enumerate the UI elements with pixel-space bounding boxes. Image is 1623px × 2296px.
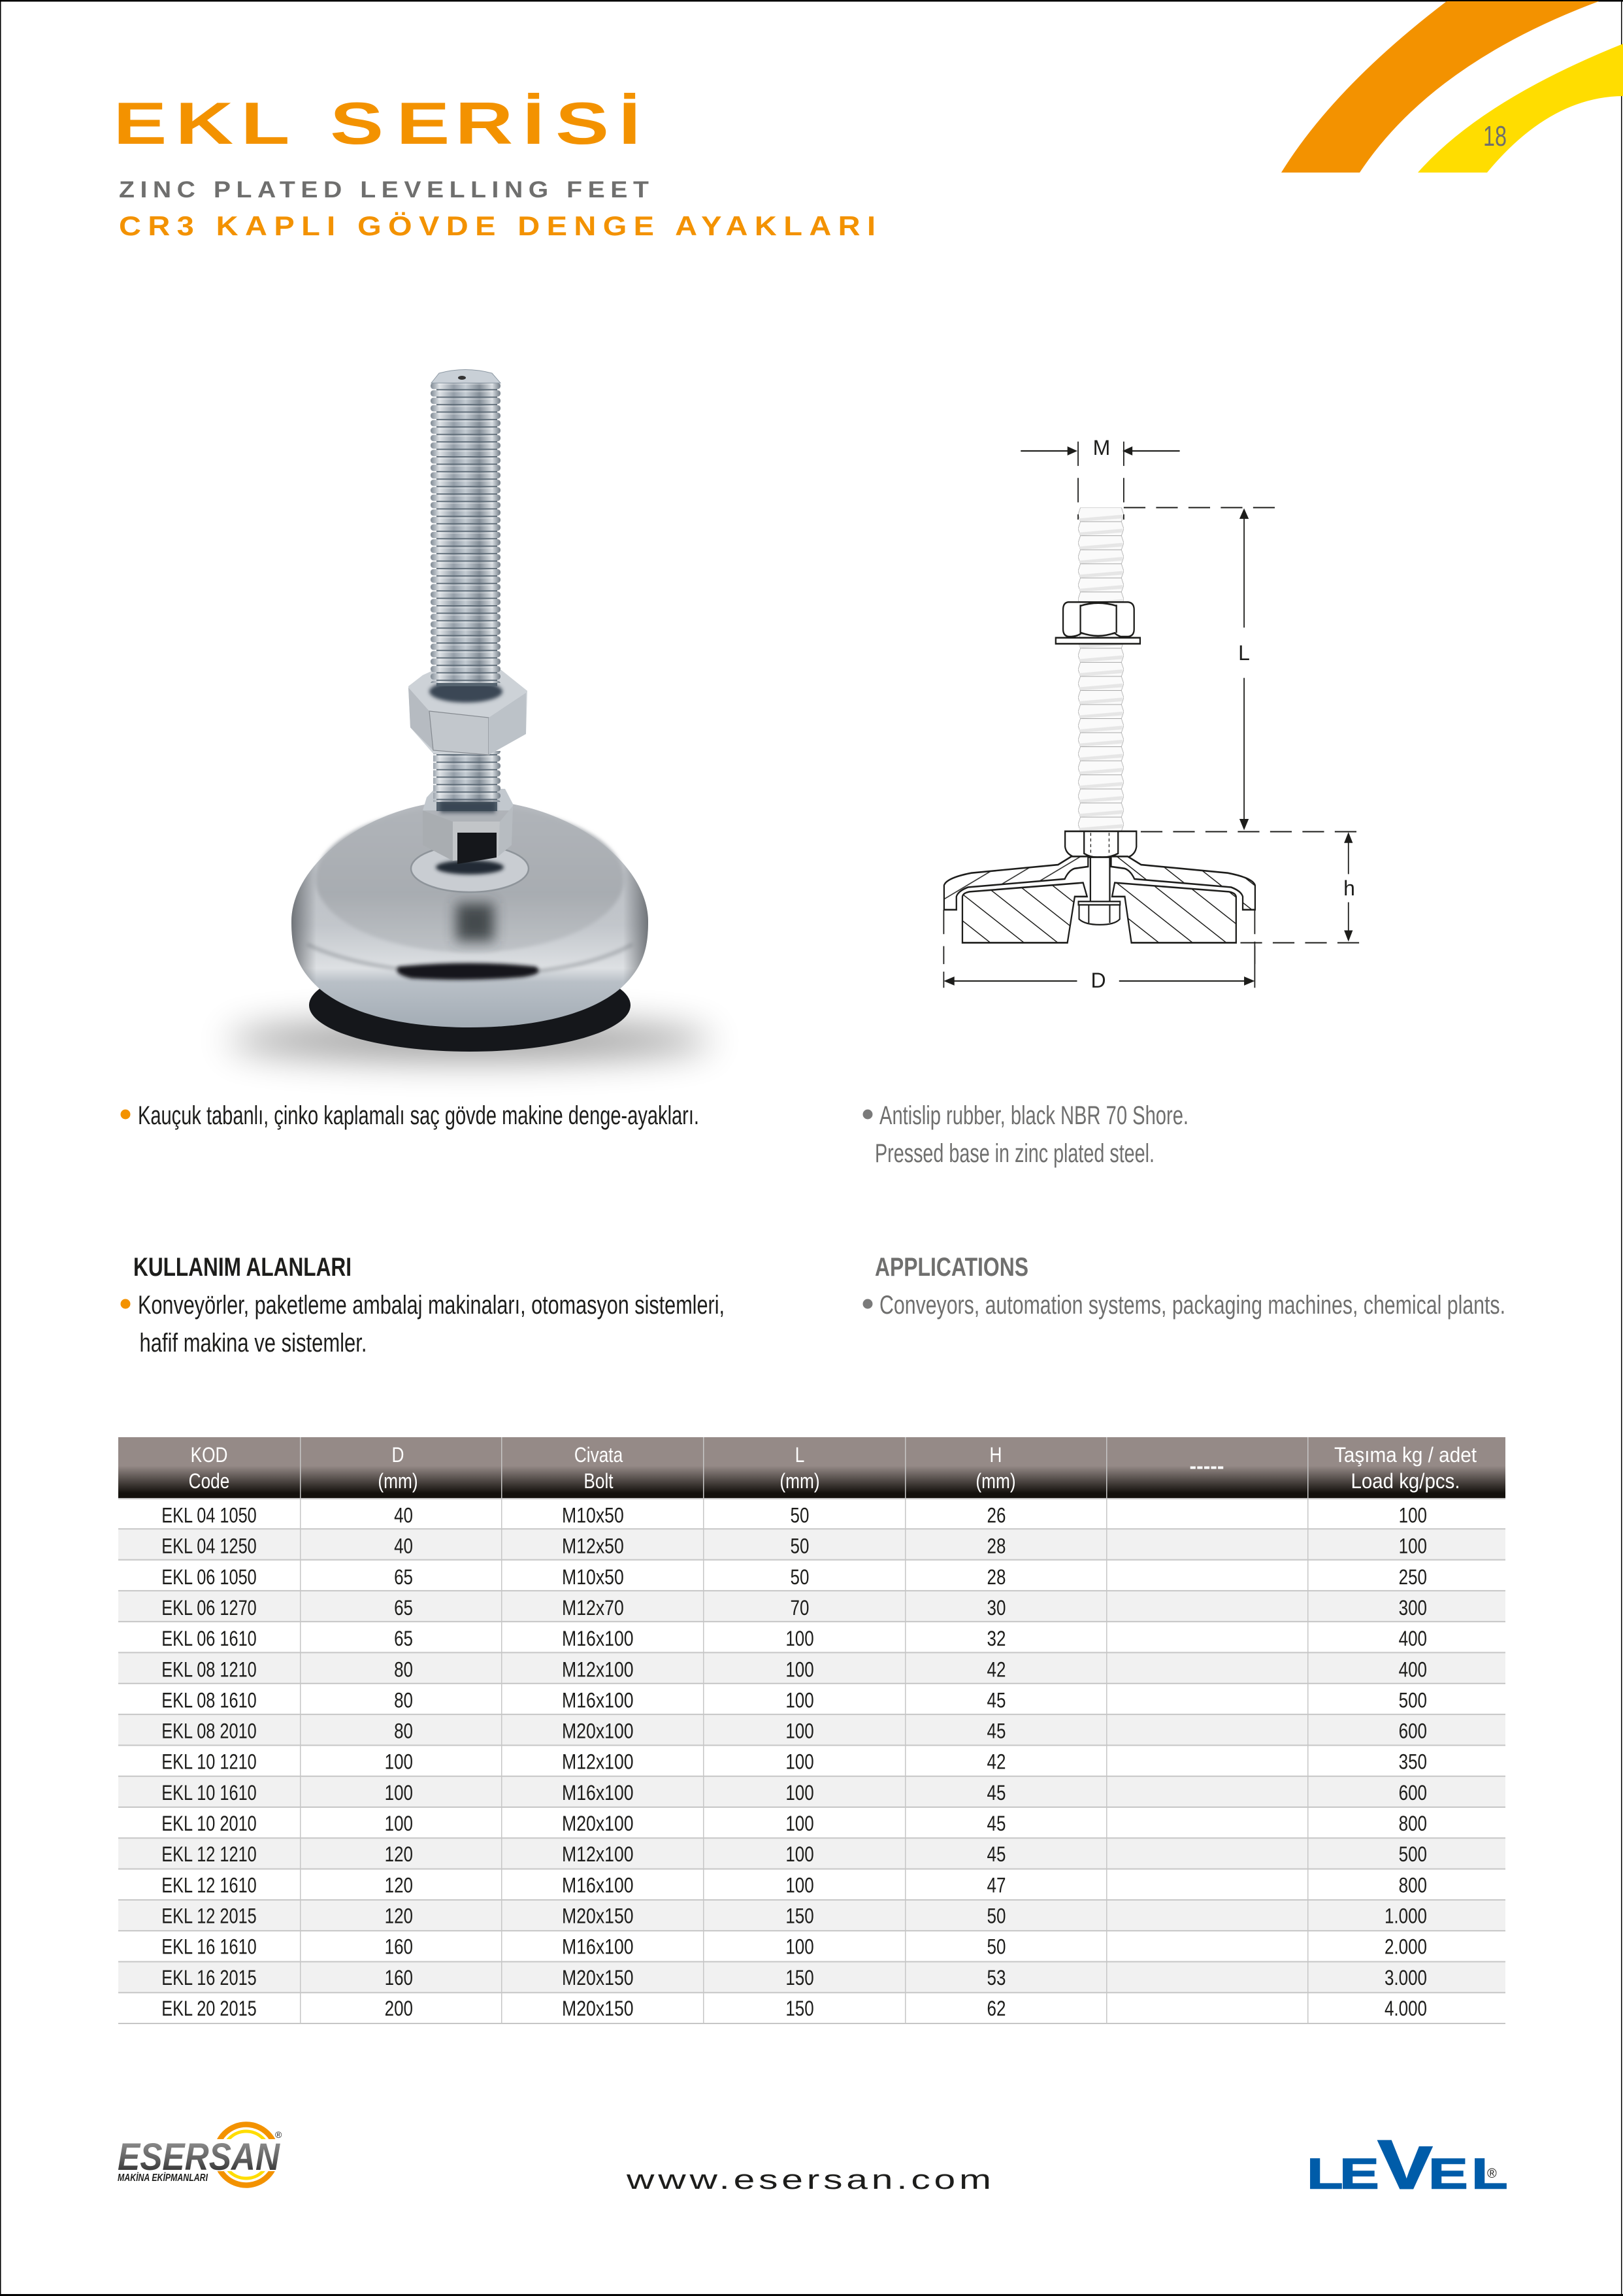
base shell, right [1111,856,1255,910]
table header labels [189,1443,1477,1493]
dark reflection on rim [397,963,538,980]
column: L: 100 [785,1812,814,1836]
column: H: 45 [987,1812,1006,1836]
column: D: 120 [385,1842,413,1867]
column: code: EKL 08 2010 [161,1720,257,1743]
column: bolt: M10x50 [562,1504,624,1527]
table header labels: D [392,1444,404,1467]
column: code: EKL 06 1610 [161,1627,257,1651]
column: load: 3.000 [1385,1966,1427,1990]
rim contour [307,944,632,974]
column: bolt: M20x100 [562,1812,634,1836]
column: H: 26 [987,1504,1006,1527]
column: code: EKL 08 1610 [161,1689,257,1712]
h dimension arrow [1344,832,1352,942]
column: D: 80 [394,1720,413,1743]
column: load: 600 [1399,1781,1427,1805]
column: D: 65 [394,1596,413,1620]
collar [411,845,529,892]
column: H: 45 [987,1842,1006,1867]
column: D: 160 [385,1966,413,1990]
logo: Esersan: ESERSAN [118,2136,280,2178]
threaded shaft [1078,508,1124,831]
rubber base [309,959,631,1052]
column: bolt: M20x150 [562,1966,634,1989]
column: bolt: M16x100 [562,1781,634,1805]
table header labels: (mm) [975,1471,1016,1493]
technical drawing with dimensions [943,436,1360,992]
rubber pad, left [962,883,1087,942]
column: L: 100 [785,1750,814,1774]
adjusting nut and washer [1056,602,1140,644]
column: load: 4.000 [1385,1997,1427,2021]
description: English [862,1101,1189,1168]
column: L: 50 [791,1565,809,1589]
column: H: 45 [987,1781,1006,1805]
table header labels: (mm) [378,1471,418,1493]
upper thread [436,382,497,686]
logo: Level: V [1377,2125,1435,2204]
column: H [987,1504,1006,2021]
subtitle: Turkish: CR3 KAPLI GÖVDE DENGE AYAKLARI [119,211,876,241]
column: D: 200 [385,1997,413,2021]
base nut [1065,831,1136,902]
column: H: 53 [987,1966,1006,1990]
logo: Esersan: MAKİNA EKİPMANLARI [118,2172,208,2184]
column: load: 800 [1399,1874,1427,1897]
logo: Esersan: ® [275,2129,282,2140]
column: bolt: M16x100 [562,1627,634,1651]
floor shadow [228,1022,712,1059]
column: D: 160 [385,1935,413,1959]
column: L: 70 [791,1596,809,1620]
column: code: EKL 08 1210 [161,1658,257,1682]
product photo: levelling foot [228,370,712,1059]
label D: D [1090,969,1106,992]
description: Turkish: Kauçuk tabanlı, çinko kaplamalı saç gövde makine denge-ayakları. [138,1101,699,1130]
column: code: EKL 10 1610 [161,1782,257,1805]
column: code: EKL 10 2010 [161,1812,257,1836]
column: load: 500 [1399,1689,1427,1712]
D dimension arrow [943,942,1254,988]
column: D: 65 [394,1627,413,1651]
column: load: 100 [1399,1535,1427,1558]
label h: h [1343,876,1355,900]
column: L: 100 [785,1874,814,1897]
column: H: 28 [987,1565,1006,1589]
column: L [785,1504,814,2021]
table header labels: ----- [1189,1454,1224,1478]
logo: Level: E [1428,2150,1468,2198]
column: H: 62 [987,1997,1006,2021]
dashed extension lines [943,442,1360,964]
column: load: 350 [1399,1750,1427,1774]
column: code: EKL 12 1210 [161,1843,257,1867]
column: bolt: M20x150 [562,1997,634,2021]
column: bolt: M16x100 [562,1689,634,1712]
column: load: 300 [1399,1596,1427,1620]
column: D: 80 [394,1689,413,1712]
table header background [118,1437,1505,1498]
column: H: 42 [987,1750,1006,1774]
column: load [1385,1504,1427,2021]
column: H: 42 [987,1658,1006,1682]
column: bolt: M10x50 [562,1565,624,1589]
column: L: 100 [785,1627,814,1651]
label M: M [1093,436,1110,459]
column: load: 1.000 [1385,1905,1427,1928]
column: code: EKL 04 1050 [161,1505,257,1527]
corner arcs: orange and yellow bands [1281,1,1623,173]
rubber pad, right [1112,883,1236,942]
column: load: 100 [1399,1504,1427,1527]
column: H: 45 [987,1689,1006,1712]
specification table [118,1437,1505,2024]
applications text: Turkish: hafif makina ve sistemler. [140,1329,367,1357]
column: L: 100 [785,1689,814,1712]
column: load: 400 [1399,1627,1427,1651]
column: D: 65 [394,1565,413,1589]
column: L: 150 [785,1997,814,2021]
column: code: EKL 10 1210 [161,1751,257,1774]
central reflection [456,903,494,941]
table header labels: Taşıma kg / adet [1334,1443,1477,1467]
table header labels: Civata [574,1444,623,1467]
column: code: EKL 04 1250 [161,1535,257,1558]
column: bolt: M20x100 [562,1720,634,1743]
column: load: 500 [1399,1842,1427,1867]
column: D: 40 [394,1504,413,1527]
column: load: 400 [1399,1658,1427,1682]
L dimension arrow [1239,508,1249,830]
column: code: EKL 16 2015 [161,1967,257,1990]
table header labels: H [990,1444,1002,1467]
table header labels: L [795,1444,804,1467]
heading: Applications: APPLICATIONS [875,1253,1028,1282]
applications text: Turkish: Konveyörler, paketleme ambalaj makinaları, otomasyon sistemleri, [138,1291,725,1320]
column: bolt: M12x100 [562,1750,634,1774]
steel disc [291,800,648,1027]
column: code [161,1505,257,2021]
column: bolt: M12x100 [562,1658,634,1682]
column: load: 800 [1399,1812,1427,1836]
logo: Level: E [1339,2150,1379,2198]
column: code: EKL 20 2015 [161,1997,257,2021]
column: bolt: M12x100 [562,1843,634,1867]
heading: Kullanım alanları: KULLANIM ALANLARI [133,1253,352,1282]
logo: Level: L [1307,2150,1343,2198]
column: H: 28 [987,1535,1006,1558]
column: D: 80 [394,1658,413,1682]
logo: Level [1310,2140,1507,2189]
description: English: Pressed base in zinc plated steel. [875,1139,1155,1168]
column: L: 100 [785,1842,814,1867]
label L: L [1238,641,1250,665]
column: bolt: M12x70 [562,1597,624,1620]
column: L: 50 [791,1504,809,1527]
title: EKL SERİSİ [113,90,641,156]
column: code: EKL 16 1610 [161,1936,257,1959]
bolt tip [431,370,500,383]
column: code: EKL 12 2015 [161,1905,257,1928]
column: bolt [562,1504,634,2021]
column: load: 600 [1399,1720,1427,1743]
column: load: 250 [1399,1565,1427,1589]
description: English: Antislip rubber, black NBR 70 Shore. [879,1101,1189,1130]
column: H: 50 [987,1935,1006,1959]
column: code: EKL 12 1610 [161,1874,257,1897]
column: bolt: M20x150 [562,1905,634,1928]
column: D: 120 [385,1874,413,1897]
website: www.esersan.com [626,2164,991,2195]
column: H: 32 [987,1627,1006,1651]
inner retaining nut [1079,901,1120,925]
column: L: 100 [785,1781,814,1805]
logo: Esersan [111,2124,287,2186]
zebra rows [118,1529,1505,1992]
column: D: 100 [385,1812,413,1836]
column: D: 100 [385,1750,413,1774]
table header labels: Load kg/pcs. [1351,1469,1460,1493]
column: H: 30 [987,1596,1006,1620]
base shell, left [944,856,1088,910]
column: L: 150 [785,1966,814,1990]
column: D [385,1504,413,2021]
table header labels: (mm) [779,1471,820,1493]
table header labels: Code [189,1471,229,1493]
column: bolt: M12x50 [562,1535,624,1558]
M dimension arrows [1021,446,1180,456]
column: D: 100 [385,1781,413,1805]
column: code: EKL 06 1050 [161,1566,257,1589]
column: L: 100 [785,1658,814,1682]
column: bolt: M16x100 [562,1874,634,1897]
column: H: 50 [987,1905,1006,1928]
column: L: 100 [785,1935,814,1959]
logo: Level: ® [1487,2167,1497,2181]
subtitle: English: ZINC PLATED LEVELLING FEET [119,176,649,203]
column: L: 150 [785,1905,814,1928]
column: H: 45 [987,1720,1006,1743]
column: code: EKL 06 1270 [161,1597,257,1620]
lower thread and lower nut [423,788,513,810]
column: L: 100 [785,1720,814,1743]
column: D: 120 [385,1905,413,1928]
column: load: 2.000 [1385,1935,1427,1959]
applications text: Turkish [120,1291,725,1357]
upper nut [408,670,527,755]
page number: 18 [1483,120,1507,152]
table header labels: KOD [191,1444,227,1467]
column: L: 50 [791,1535,809,1558]
logo: Level: L [1471,2150,1508,2198]
column: H: 47 [987,1874,1006,1897]
table header labels: Bolt [583,1471,614,1493]
column: bolt: M16x100 [562,1935,634,1959]
column: D: 40 [394,1535,413,1558]
